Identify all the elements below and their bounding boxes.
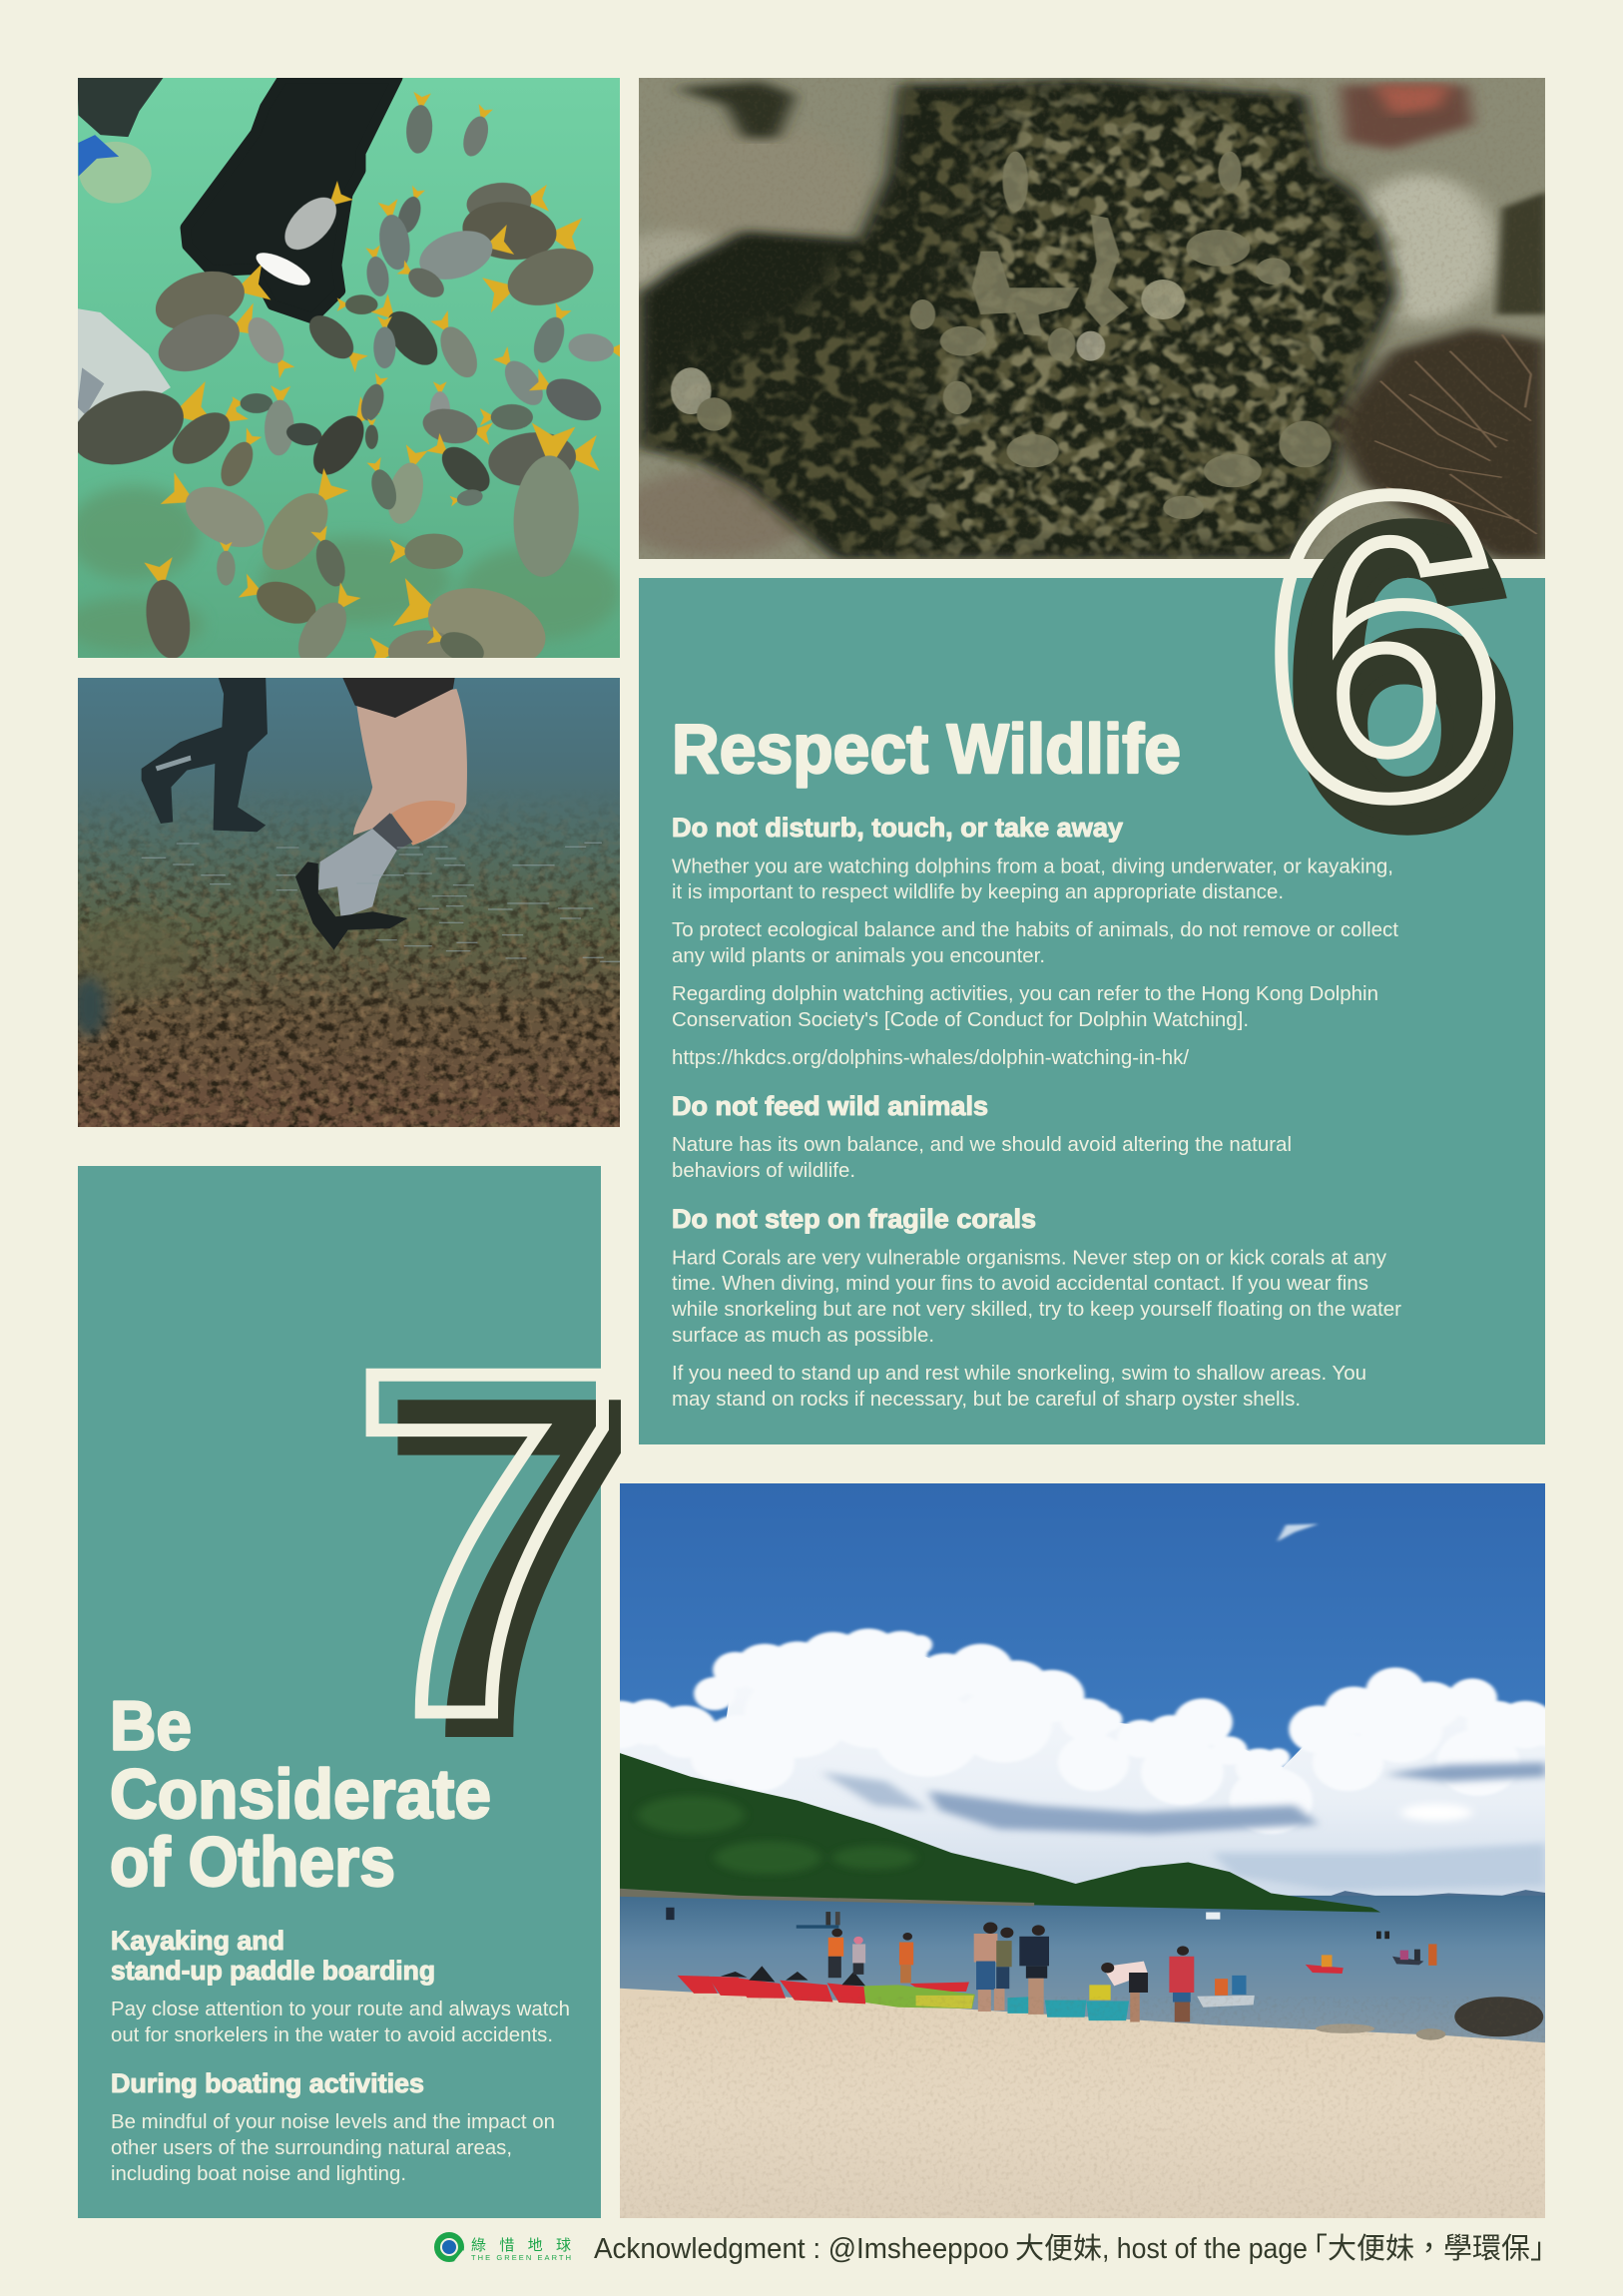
text block: dolphin watching code: Regarding dolphin watching activities, you can refer to the Hong Kong Dolphin [672, 982, 1378, 1005]
footer acknowledgment: Acknowledgment : @Imsheeppoo [594, 2233, 1009, 2265]
numeral 6 with offset shadow: 6 [1266, 407, 1504, 886]
text block: keep distance: Whether you are watching dolphins from a boat, diving underwater, or kayaking, [672, 855, 1393, 878]
text block: url: https://hkdcs.org/dolphins-whales/dolphin-watching-in-hk/ [672, 1046, 1189, 1069]
footer acknowledgment: , host of the page [1102, 2233, 1308, 2265]
photo: legs standing on coral with small fish [71, 678, 621, 1127]
footer acknowledgment: 大便妹 [1015, 2232, 1102, 2265]
text block: dolphin watching code [672, 982, 1378, 1031]
text block: noise levels: other users of the surrounding natural areas, [111, 2136, 512, 2159]
photo: beach with kayaks, people, clouds and green hill [590, 1483, 1570, 2221]
heading: respect wildlife: Respect Wildlife [672, 710, 1181, 788]
text block: noise levels: including boat noise and lighting. [111, 2162, 406, 2185]
footer acknowledgment: 「大便妹，學環保」 [1299, 2232, 1559, 2265]
text block: natural behaviors: behaviors of wildlife. [672, 1159, 855, 1182]
text block: watch for snorkelers: out for snorkelers in the water to avoid accidents. [111, 2023, 553, 2046]
subheading: kayaking: stand-up paddle boarding [111, 1956, 435, 1986]
text block: do not collect: To protect ecological balance and the habits of animals, do not remove or collect [672, 918, 1398, 941]
numeral 6 with offset shadow: 6 [1284, 437, 1522, 916]
text block: hard corals: Hard Corals are very vulnerable organisms. Never step on or kick corals at any [672, 1246, 1387, 1270]
text block: noise levels [111, 2110, 555, 2185]
text block: hard corals [671, 1246, 1401, 1347]
text block: dolphin watching code: Conservation Society's [Code of Conduct for Dolphin Watching]. [672, 1008, 1249, 1031]
footer logo: the green earth [437, 2235, 571, 2262]
text block: natural behaviors: Nature has its own balance, and we should avoid altering the natural [672, 1133, 1292, 1156]
panel: respect wildlife [639, 578, 1545, 1444]
numeral 7 with offset shadow: 7 [377, 1293, 642, 1842]
heading: be considerate of others: Considerate [110, 1755, 491, 1833]
text block: do not collect: any wild plants or animals you encounter. [672, 944, 1045, 967]
text block: natural behaviors [672, 1133, 1292, 1182]
heading: be considerate of others: Be [110, 1687, 192, 1765]
footer acknowledgment [594, 2232, 1559, 2265]
photo: snorkeler hand surrounded by yellow-tailed fish [64, 78, 627, 679]
panel: be considerate of others [78, 1166, 601, 2218]
footer logo: the green earth: 綠惜地球 [471, 2237, 571, 2254]
heading: be considerate of others: of Others [110, 1823, 395, 1901]
text block: resting while snorkeling [672, 1362, 1366, 1411]
footer logo: the green earth: THE GREEN EARTH [471, 2253, 571, 2262]
subheading: do not step: Do not step on fragile corals [672, 1204, 1036, 1234]
text block: noise levels: Be mindful of your noise levels and the impact on [111, 2110, 555, 2133]
subheading: kayaking [111, 1926, 435, 1986]
subheading: do not feed: Do not feed wild animals [672, 1091, 988, 1121]
text block: keep distance [672, 855, 1393, 903]
photo: hard coral colony on the sea floor [610, 78, 1547, 559]
text block: keep distance: it is important to respect wildlife by keeping an appropriate distance. [672, 880, 1284, 903]
text block: hard corals: surface as much as possible. [672, 1324, 934, 1347]
numeral 7 with offset shadow: 7 [351, 1270, 624, 1817]
subheading: do not disturb: Do not disturb, touch, or take away [672, 813, 1123, 843]
text block: watch for snorkelers: Pay close attention to your route and always watch [111, 1998, 570, 2020]
text block: hard corals: while snorkeling but are not very skilled, try to keep yourself floating on the water [671, 1298, 1401, 1321]
text block: resting while snorkeling: may stand on rocks if necessary, but be careful of sharp oyster shells. [672, 1388, 1301, 1411]
text block: hard corals: time. When diving, mind your fins to avoid accidental contact. If you wear fins [672, 1272, 1368, 1295]
text block: do not collect [672, 918, 1398, 967]
heading: be considerate of others [110, 1687, 491, 1901]
text block: watch for snorkelers [111, 1998, 570, 2046]
text block: resting while snorkeling: If you need to stand up and rest while snorkeling, swim to shallow areas. You [672, 1362, 1366, 1385]
subheading: boating: During boating activities [111, 2068, 424, 2098]
subheading: kayaking: Kayaking and [111, 1926, 284, 1956]
